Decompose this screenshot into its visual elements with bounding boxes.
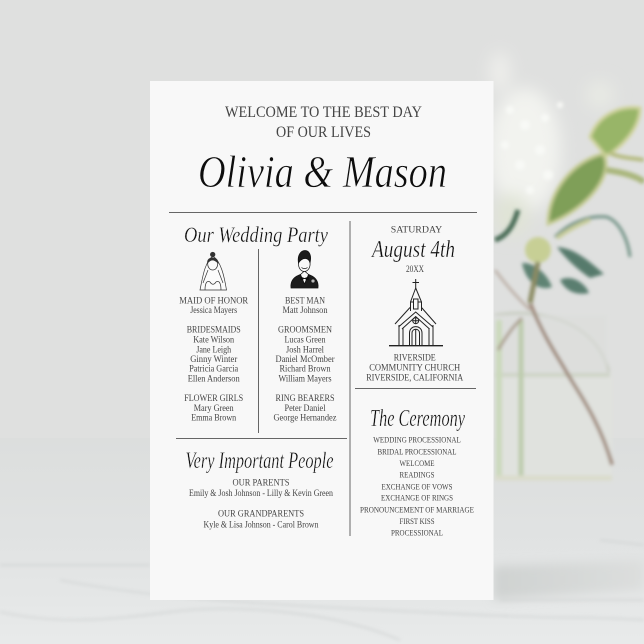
card shadow <box>493 560 644 600</box>
group: bridal party names <box>179 295 249 423</box>
group: groom party names <box>274 295 336 423</box>
group: bridal party names: Ellen Anderson <box>188 373 240 383</box>
group: bridal party names: Emma Brown <box>191 413 237 423</box>
text: venue <box>366 352 464 383</box>
background: vase and flowers <box>489 52 644 478</box>
icon: groom <box>291 250 318 288</box>
group: groom party names: Lucas Green <box>284 334 326 344</box>
heading: the ceremony: The Ceremony <box>370 406 465 432</box>
heading: date: August 4th <box>370 237 455 263</box>
list: ceremony order: WEDDING PROCESSIONAL <box>373 435 461 445</box>
panel: date and venue: SATURDAY <box>391 225 443 235</box>
panel: very important people: Emily & Josh Johnson - Lilly & Kevin Green <box>189 488 333 498</box>
group: groom party names: Daniel McOmber <box>276 354 334 364</box>
heading: welcome: WELCOME TO THE BEST DAY <box>225 104 422 121</box>
heading: welcome <box>225 104 422 141</box>
group: groom party names: Josh Harrel <box>286 344 324 354</box>
group: groom party names: RING BEARERS <box>276 393 334 403</box>
background: marble table <box>0 438 644 644</box>
panel: very important people <box>186 448 334 529</box>
group: groom party names: George Hernandez <box>274 413 336 423</box>
panel: very important people: OUR PARENTS <box>232 478 290 488</box>
list: ceremony order: EXCHANGE OF RINGS <box>381 493 453 503</box>
group: bridal party names: Patricia Garcia <box>189 364 238 374</box>
group: groom party names: William Mayers <box>278 373 332 383</box>
group: groom party names: Matt Johnson <box>282 305 328 315</box>
heading: welcome: OF OUR LIVES <box>276 124 371 141</box>
panel: very important people: Kyle & Lisa Johnson - Carol Brown <box>204 519 319 529</box>
group: groom party names: BEST MAN <box>285 295 325 305</box>
icon: church <box>389 279 443 346</box>
list: ceremony order: PRONOUNCEMENT OF MARRIAGE <box>360 504 474 514</box>
background: wall <box>0 0 644 445</box>
text: venue: RIVERSIDE, CALIFORNIA <box>366 373 464 383</box>
list: ceremony order: BRIDAL PROCESSIONAL <box>378 446 456 456</box>
list: ceremony order: FIRST KISS <box>400 516 435 526</box>
group: groom party names: GROOMSMEN <box>278 325 332 335</box>
icon: bride <box>200 252 226 290</box>
title: couple names: Olivia & Mason <box>198 146 447 197</box>
heading: very important people: Very Important People <box>186 448 334 473</box>
list: ceremony order: WELCOME <box>400 458 434 468</box>
heading: our wedding party: Our Wedding Party <box>184 222 328 247</box>
group: groom party names: Richard Brown <box>280 364 331 374</box>
list: ceremony order: PROCESSIONAL <box>391 528 443 538</box>
panel: the ceremony <box>360 406 474 538</box>
group: bridal party names: MAID OF HONOR <box>179 295 249 305</box>
group: bridal party names: FLOWER GIRLS <box>184 393 243 403</box>
list: ceremony order: EXCHANGE OF VOWS <box>382 481 453 491</box>
list: ceremony order <box>360 435 474 538</box>
panel: date and venue <box>366 225 464 383</box>
group: bridal party names: Jane Leigh <box>196 344 232 354</box>
wedding program card <box>150 81 494 600</box>
text: venue: RIVERSIDE <box>394 352 436 362</box>
panel: date and venue: 20XX <box>406 264 424 274</box>
panel: our wedding party <box>179 222 336 423</box>
group: bridal party names: BRIDESMAIDS <box>187 325 241 335</box>
group: bridal party names: Mary Green <box>194 403 234 413</box>
list: ceremony order: READINGS <box>400 469 435 479</box>
group: bridal party names: Jessica Mayers <box>190 305 238 315</box>
text: venue: COMMUNITY CHURCH <box>369 362 461 372</box>
group: bridal party names: Ginny Winter <box>190 354 237 364</box>
group: bridal party names: Kate Wilson <box>193 334 235 344</box>
group: groom party names: Peter Daniel <box>284 403 326 413</box>
panel: very important people: OUR GRANDPARENTS <box>218 509 304 519</box>
